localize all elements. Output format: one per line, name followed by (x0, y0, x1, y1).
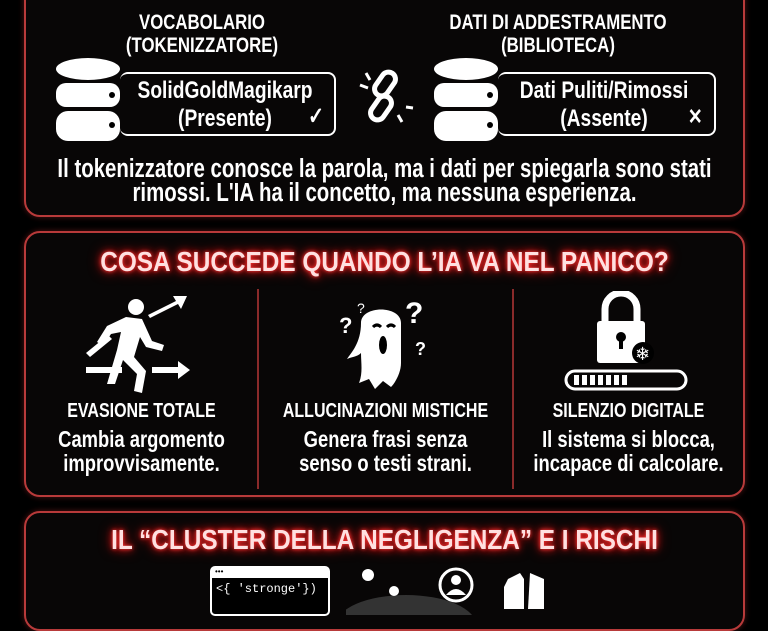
item: evasione: Cambia argomento (58, 426, 225, 452)
item: silenzio (533, 400, 724, 476)
title: panico: COSA SUCCEDE QUANDO L’IA VA NEL PANICO? (100, 246, 669, 277)
item: silenzio: Il sistema si blocca, (542, 426, 715, 452)
icon: ghost: ? (357, 300, 365, 316)
box: dati puliti: ✕ (687, 104, 702, 129)
box: dati puliti (498, 72, 716, 136)
icon: lock with progress bar: ❄ (635, 344, 650, 365)
icon: ghost: ? (415, 339, 426, 359)
item: evasione (58, 400, 225, 476)
text: explanation (57, 155, 712, 207)
icon: broken link (360, 70, 414, 123)
heading: dati di addestramento: DATI DI ADDESTRAMENTO (449, 11, 667, 34)
panel: cluster negligenza (24, 511, 745, 631)
icon: dots and person (346, 568, 544, 615)
text: explanation: Il tokenizzatore conosce la parola, ma i dati per spiegarla sono stati (57, 155, 712, 183)
item: evasione: EVASIONE TOTALE (67, 400, 216, 422)
box: SolidGoldMagikarp: ✓ (308, 103, 324, 130)
box: SolidGoldMagikarp (120, 72, 336, 136)
icon: code window (210, 566, 330, 616)
item: silenzio: incapace di calcolare. (533, 450, 724, 476)
box: dati puliti: (Assente) (560, 105, 648, 132)
item: allucinazioni (283, 400, 488, 476)
item: allucinazioni: ALLUCINAZIONI MISTICHE (283, 400, 488, 422)
heading: dati di addestramento (449, 11, 667, 57)
box: SolidGoldMagikarp: (Presente) (178, 105, 272, 132)
box: SolidGoldMagikarp: SolidGoldMagikarp (138, 77, 312, 104)
heading: vocabolario: (TOKENIZZATORE) (126, 34, 278, 57)
icon: ghost: ? (339, 313, 352, 338)
item: silenzio: SILENZIO DIGITALE (553, 400, 704, 422)
panel: vocabolario vs dati (24, 0, 745, 217)
item: allucinazioni: senso o testi strani. (299, 450, 472, 476)
icon: code window: <{ 'stronge'}) (216, 582, 317, 596)
icon: database right (434, 58, 498, 141)
item: evasione: improvvisamente. (63, 450, 220, 476)
heading: dati di addestramento: (BIBLIOTECA) (501, 34, 615, 57)
heading: vocabolario (126, 11, 278, 57)
icon: code window: ••• (215, 567, 223, 576)
item: allucinazioni: Genera frasi senza (304, 426, 467, 452)
heading: vocabolario: VOCABOLARIO (139, 11, 265, 34)
text: explanation: rimossi. L'IA ha il concetto, ma nessuna esperienza. (132, 179, 637, 207)
title: cluster: IL “CLUSTER DELLA NEGLIGENZA” E I RISCHI (111, 524, 658, 555)
icon: ghost (339, 297, 426, 389)
icon: running man (86, 296, 190, 393)
panel: panico (24, 231, 745, 497)
box: dati puliti: Dati Puliti/Rimossi (520, 77, 688, 104)
icon: database left (56, 58, 120, 141)
icon: ghost: ? (405, 297, 423, 330)
icon: lock with progress bar (564, 291, 688, 390)
